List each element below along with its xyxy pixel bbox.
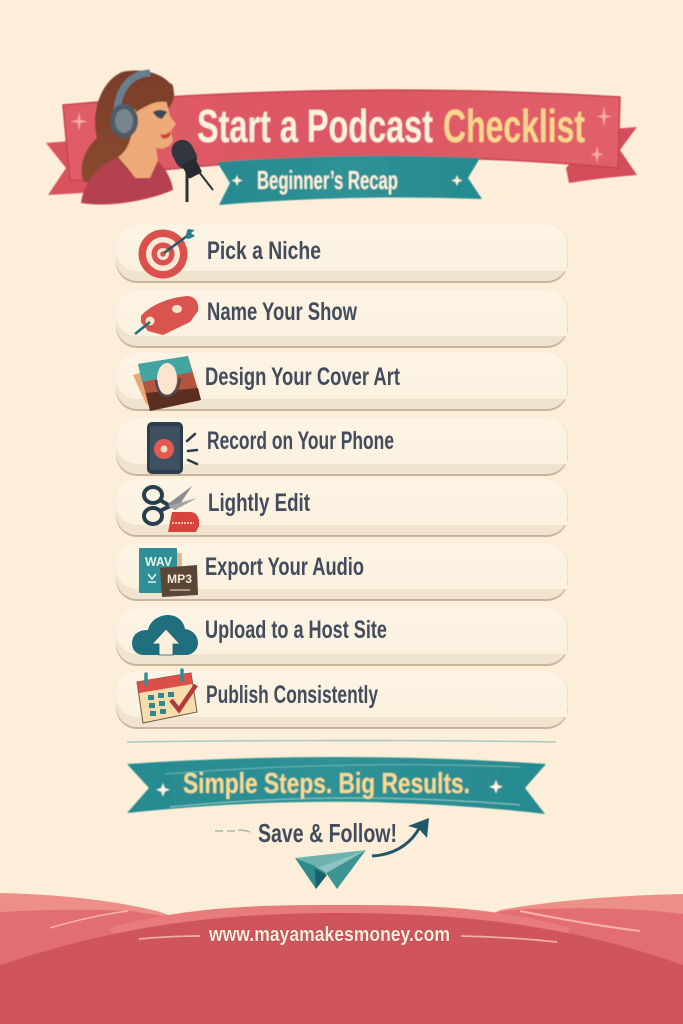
checklist — [116, 225, 568, 729]
item: export your audio — [116, 543, 568, 601]
icon: tag — [135, 296, 198, 335]
item: lightly edit — [116, 479, 568, 537]
item: upload to a host site — [116, 608, 568, 666]
title accent word: Checklist — [443, 100, 585, 152]
sparkles — [70, 106, 612, 163]
item: record on your phone — [116, 418, 568, 476]
label: Name Your Show — [207, 298, 357, 326]
fringe — [135, 82, 174, 112]
tagline ribbon — [127, 757, 546, 814]
arrow — [372, 818, 429, 856]
icon: microphone — [168, 136, 213, 202]
label: Design Your Cover Art — [205, 363, 400, 391]
save and follow call to action — [215, 818, 429, 889]
eye and lips — [153, 110, 167, 119]
icon: paper plane — [295, 850, 366, 889]
label: Upload to a Host Site — [205, 616, 387, 644]
icon: scissors — [144, 486, 199, 532]
footer mid waves — [0, 908, 683, 1000]
subtitle sparkles — [232, 175, 462, 186]
item: design your cover art — [116, 353, 568, 411]
icon: phone — [147, 422, 197, 474]
label: Pick a Niche — [207, 237, 321, 265]
icon: cloud upload — [132, 615, 198, 655]
neck and face — [118, 99, 176, 178]
header banner — [46, 90, 637, 205]
headphone cup — [110, 104, 138, 138]
teal subtitle ribbon — [217, 156, 482, 205]
left ribbon tail — [46, 139, 100, 195]
item: publish consistently — [116, 670, 568, 729]
title: Start a Podcast — [197, 100, 433, 152]
main red ribbon — [63, 90, 620, 181]
right ribbon tail — [566, 127, 637, 183]
hair back — [82, 70, 174, 184]
label: Export Your Audio — [205, 553, 364, 581]
headphones band — [117, 73, 150, 112]
website text: www.mayamakesmoney.com — [208, 924, 450, 946]
icon: target — [138, 229, 195, 278]
footer lighter band — [110, 905, 570, 950]
footer side waves — [0, 893, 683, 960]
shoulders — [81, 158, 173, 205]
icon: audio files: WAV — [145, 555, 173, 569]
label: Record on Your Phone — [207, 427, 394, 455]
item: pick a niche — [116, 225, 568, 283]
icon: audio files — [139, 548, 198, 597]
illustration: podcaster woman — [81, 70, 176, 205]
label: Lightly Edit — [208, 489, 310, 517]
item: name your show — [116, 290, 568, 348]
sparkles — [156, 780, 503, 797]
subtitle: Beginner’s Recap — [257, 165, 398, 195]
footer — [0, 893, 683, 1024]
label: Publish Consistently — [206, 681, 378, 709]
icon: calendar — [137, 670, 197, 723]
icon: cover art — [133, 356, 201, 411]
icon: audio files: MP3 — [167, 572, 192, 586]
ribbon shape — [127, 757, 546, 814]
tagline: Simple Steps. Big Results. — [183, 768, 470, 800]
call to action text: Save & Follow! — [258, 818, 397, 848]
footer base — [0, 913, 683, 1024]
